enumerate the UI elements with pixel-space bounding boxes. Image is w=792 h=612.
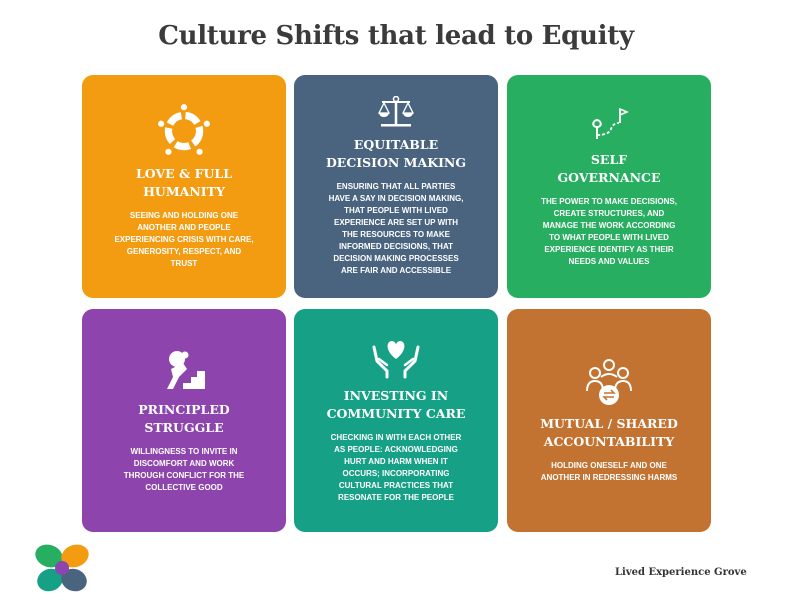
body text: CHECKING IN WITH EACH OTHER (331, 433, 461, 442)
body text: TRUST (171, 259, 197, 268)
body text: SEEING AND HOLDING ONE (130, 211, 238, 220)
body text (114, 211, 254, 268)
title: Culture Shifts that lead to Equity (158, 21, 634, 51)
panel: love & full humanity (82, 75, 286, 298)
body text: CREATE STRUCTURES, AND (554, 209, 664, 218)
heading: ACCOUNTABILITY (544, 434, 674, 448)
body text: THE RESOURCES TO MAKE (342, 230, 450, 239)
heading (326, 137, 466, 170)
body text: COLLECTIVE GOOD (145, 483, 223, 492)
heading: INVESTING IN (344, 388, 448, 403)
heading (138, 402, 230, 434)
body text: EXPERIENCING CRISIS WITH CARE, (114, 235, 254, 244)
body text: HURT AND HARM WHEN IT (344, 457, 448, 466)
body text: INFORMED DECISIONS, THAT (339, 242, 453, 251)
icon: person pushing up stairs (167, 351, 205, 389)
body text (124, 447, 244, 492)
body text: CULTURAL PRACTICES THAT (339, 481, 453, 490)
heading: LOVE & FULL (136, 166, 232, 181)
heading (540, 416, 678, 448)
heading: PRINCIPLED (138, 402, 230, 417)
body text: DECISION MAKING PROCESSES (333, 254, 459, 263)
body text: NEEDS AND VALUES (569, 257, 649, 266)
heading: MUTUAL / SHARED (540, 416, 678, 431)
icon: scales (378, 96, 414, 126)
body text (330, 433, 462, 502)
body text: EXPERIENCE IDENTIFY AS THEIR (544, 245, 674, 254)
heading (136, 166, 232, 198)
body text: MANAGE THE WORK ACCORDING (543, 221, 675, 230)
body text: GENEROSITY, RESPECT, AND (127, 247, 241, 256)
body text: THAT PEOPLE WITH LIVED (344, 206, 448, 215)
icon: path with flag (592, 108, 629, 139)
icon: circle of people (158, 104, 210, 155)
body text: OCCURS; INCORPORATING (342, 469, 449, 478)
body text: ENSURING THAT ALL PARTIES (337, 182, 455, 191)
body text: WILLINGNESS TO INVITE IN (131, 447, 237, 456)
heading (327, 388, 465, 420)
icon: people with exchange (586, 359, 632, 405)
heading (558, 152, 660, 184)
heading: EQUITABLE (354, 137, 438, 152)
heading: SELF (591, 152, 627, 167)
body text: RESONATE FOR THE PEOPLE (338, 493, 454, 502)
body text: ARE FAIR AND ACCESSIBLE (341, 266, 451, 275)
body text: THROUGH CONFLICT FOR THE (124, 471, 244, 480)
panel: self governance (507, 75, 711, 298)
heading: STRUGGLE (144, 420, 224, 434)
body text: DISCOMFORT AND WORK (134, 459, 234, 468)
panel: equitable decision making (294, 75, 498, 298)
body text: ANOTHER IN REDRESSING HARMS (541, 473, 677, 482)
body text: HOLDING ONESELF AND ONE (551, 461, 667, 470)
body text (329, 182, 463, 275)
heading: DECISION MAKING (326, 154, 466, 170)
body text (541, 197, 677, 266)
logo: butterfly (35, 544, 89, 592)
body text: TO WHAT PEOPLE WITH LIVED (549, 233, 669, 242)
heading: COMMUNITY CARE (327, 406, 465, 420)
heading: GOVERNANCE (558, 170, 660, 184)
panel: mutual / shared accountability (507, 309, 711, 532)
icon: hands holding heart (372, 341, 420, 378)
panel: investing in community care (294, 309, 498, 532)
body text: EXPERIENCE ARE SET UP WITH (334, 218, 458, 227)
body text: THE POWER TO MAKE DECISIONS, (541, 197, 677, 206)
body text: AS PEOPLE: ACKNOWLEDGING (334, 445, 458, 454)
body text: HAVE A SAY IN DECISION MAKING, (329, 194, 463, 203)
body text: ANOTHER AND PEOPLE (137, 223, 231, 232)
footer text: Lived Experience Grove (615, 567, 747, 578)
panel: principled struggle (82, 309, 286, 532)
heading: HUMANITY (143, 184, 225, 198)
body text (541, 461, 677, 482)
